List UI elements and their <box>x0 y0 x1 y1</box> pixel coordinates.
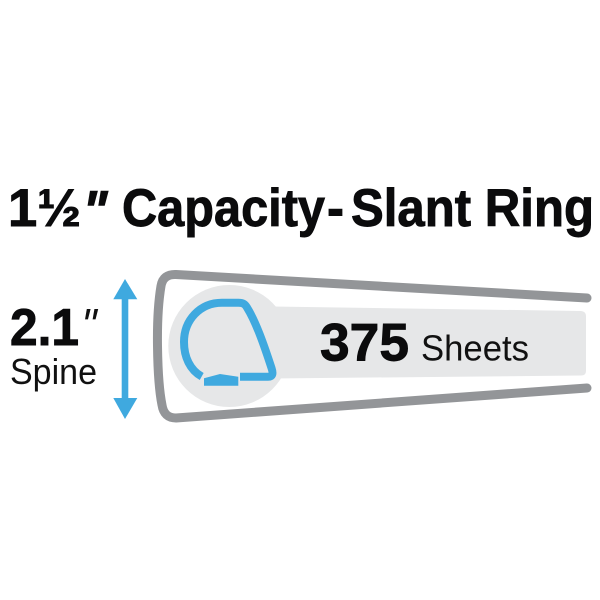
title: 1½ <box>8 179 81 238</box>
double-headed height arrow <box>113 279 137 419</box>
sheet capacity text: Sheets <box>421 328 529 369</box>
sheet capacity text <box>320 314 529 373</box>
spine measurement label: " <box>76 299 102 353</box>
capacity panel <box>168 285 586 407</box>
spine measurement label: Spine <box>10 351 97 392</box>
title: - <box>327 179 344 238</box>
icon: slant ring <box>184 303 272 386</box>
title <box>8 178 594 245</box>
binder outline <box>157 274 587 418</box>
spine measurement label <box>10 299 102 392</box>
sheet capacity text: 375 <box>320 314 409 373</box>
title: '' <box>75 178 115 245</box>
title: Capacity <box>122 179 325 238</box>
spine measurement label: 2.1 <box>10 299 79 357</box>
